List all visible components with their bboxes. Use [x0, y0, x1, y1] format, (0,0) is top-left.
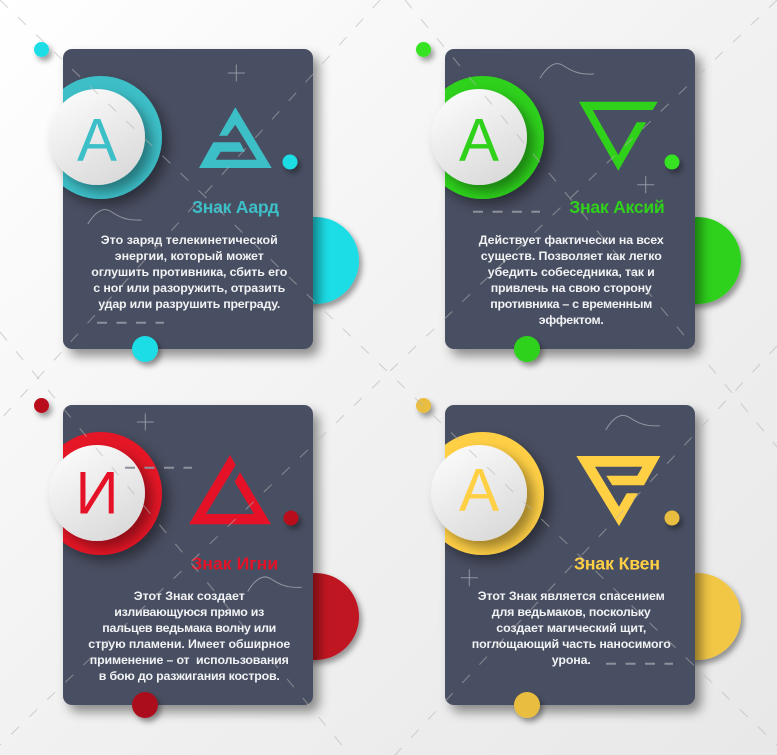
- description: привлечь на свою сторону: [491, 281, 652, 295]
- small dot top left: [34, 42, 49, 57]
- description: пальцев ведьмака волну или: [102, 621, 276, 635]
- description: Это заряд телекинетической: [101, 233, 278, 247]
- letter disc: [49, 445, 145, 541]
- icon: Igni sign: [189, 455, 271, 524]
- letter disc: А: [459, 456, 499, 523]
- description: создает магический щит,: [496, 621, 646, 635]
- card background: [445, 405, 695, 705]
- description: изливающуюся прямо из: [114, 605, 264, 619]
- ring: [39, 432, 162, 555]
- icon: Aard sign: [199, 107, 272, 168]
- icon: Kven sign: [576, 456, 660, 526]
- description: Этот Знак является спасением: [478, 589, 665, 603]
- small dot right: [664, 510, 680, 526]
- large circle behind card: [272, 217, 359, 304]
- description: противника – с временным: [490, 297, 652, 311]
- bottom dot: [514, 336, 540, 362]
- description: применение – от использования: [90, 653, 289, 667]
- large circle behind card: [654, 217, 741, 304]
- small dot right: [664, 154, 680, 170]
- panel: Знак Аксий: [416, 42, 741, 362]
- icon: Aksy sign: [579, 102, 658, 171]
- description: для ведьмаков, поскольку: [492, 605, 651, 619]
- description: удар или разрушить преграду.: [98, 297, 280, 311]
- heading: Знак Квен: [574, 553, 660, 573]
- description: в бою до разжигания костров.: [99, 669, 280, 683]
- large circle behind card: [654, 573, 741, 660]
- card background: [63, 405, 313, 705]
- small dot top left: [416, 42, 431, 57]
- description: [472, 589, 671, 667]
- letter disc: А: [77, 107, 117, 174]
- description: урона.: [552, 653, 591, 667]
- description: струю пламени. Имеет обширное: [88, 637, 290, 651]
- letter disc: И: [75, 460, 119, 527]
- description: [88, 589, 290, 683]
- bottom dot: [132, 336, 158, 362]
- ring: [421, 432, 544, 555]
- description: оглушить противника, сбить его: [91, 265, 288, 279]
- description: Действует фактически на всех: [479, 233, 664, 247]
- description: с ног или разоружить, отразить: [93, 281, 286, 295]
- description: [479, 233, 664, 327]
- letter disc: [431, 445, 527, 541]
- small dot top left: [34, 398, 49, 413]
- small dot top left: [416, 398, 431, 413]
- description: поглощающий часть наносимого: [472, 637, 671, 651]
- letter disc: [49, 89, 145, 185]
- panel: Знак Аард: [34, 42, 359, 362]
- ring: [39, 76, 162, 199]
- small dot right: [284, 510, 298, 526]
- heading: Знак Аард: [192, 197, 279, 217]
- bottom dot: [514, 692, 540, 718]
- heading: Знак Игни: [191, 553, 278, 573]
- heading: Знак Аксий: [569, 197, 665, 217]
- description: эффектом.: [539, 313, 604, 327]
- card background: [445, 49, 695, 349]
- letter disc: А: [459, 107, 499, 174]
- panel: Знак Игни: [34, 398, 359, 718]
- description: существ. Позволяет как легко: [481, 249, 662, 263]
- panel: Знак Квен: [416, 398, 741, 718]
- letter disc: [431, 89, 527, 185]
- card background: [63, 49, 313, 349]
- description: [91, 233, 288, 311]
- small dot right: [282, 154, 298, 170]
- description: Этот Знак создает: [134, 589, 245, 603]
- description: энергии, который может: [115, 249, 264, 263]
- description: убедить собеседника, так и: [488, 265, 655, 279]
- ring: [421, 76, 544, 199]
- bottom dot: [132, 692, 158, 718]
- large circle behind card: [272, 573, 359, 660]
